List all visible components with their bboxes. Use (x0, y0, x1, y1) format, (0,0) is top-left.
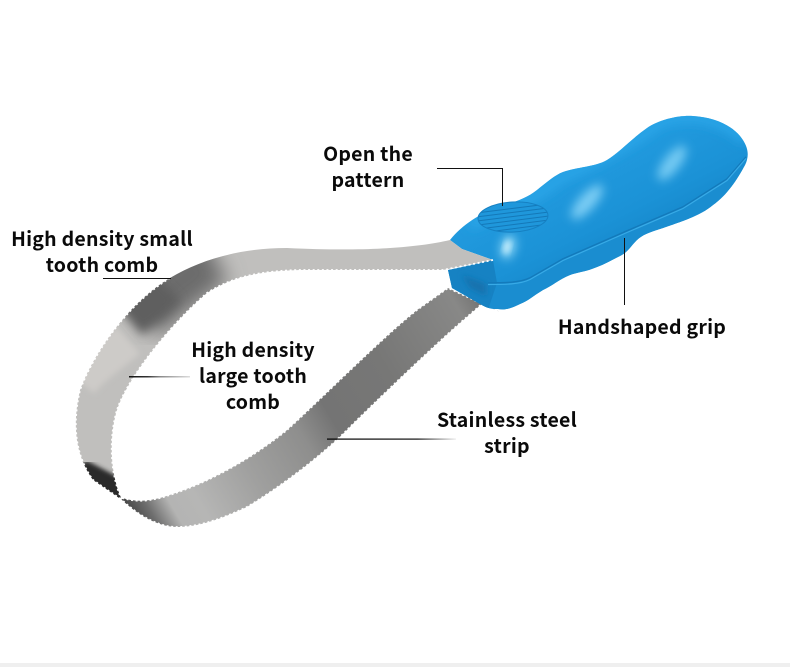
steel strip: upper run and left loop (76, 240, 494, 500)
label: open the pattern (323, 138, 502, 206)
label: open the pattern: pattern (331, 164, 405, 193)
label: high density large tooth comb: comb (226, 386, 280, 415)
label: high density large tooth comb (129, 334, 315, 415)
label: stainless steel strip (327, 404, 577, 459)
bottom page band (0, 663, 790, 667)
label: open the pattern: Open the (323, 138, 413, 167)
label: high density large tooth comb: High density (191, 334, 315, 363)
label: handshaped grip: Handshaped grip (558, 311, 726, 340)
label: high density small tooth comb: High density small (11, 223, 193, 252)
label: high density large tooth comb: large tooth (199, 360, 307, 389)
label: stainless steel strip: strip (484, 430, 530, 459)
blue handshaped handle (448, 116, 760, 320)
steel strip: lower run (122, 288, 500, 527)
label: stainless steel strip: Stainless steel (437, 404, 577, 433)
open-the pattern grip texture (476, 200, 549, 234)
label: high density small tooth comb: tooth comb (46, 249, 158, 278)
label: high density small tooth comb (11, 223, 193, 278)
